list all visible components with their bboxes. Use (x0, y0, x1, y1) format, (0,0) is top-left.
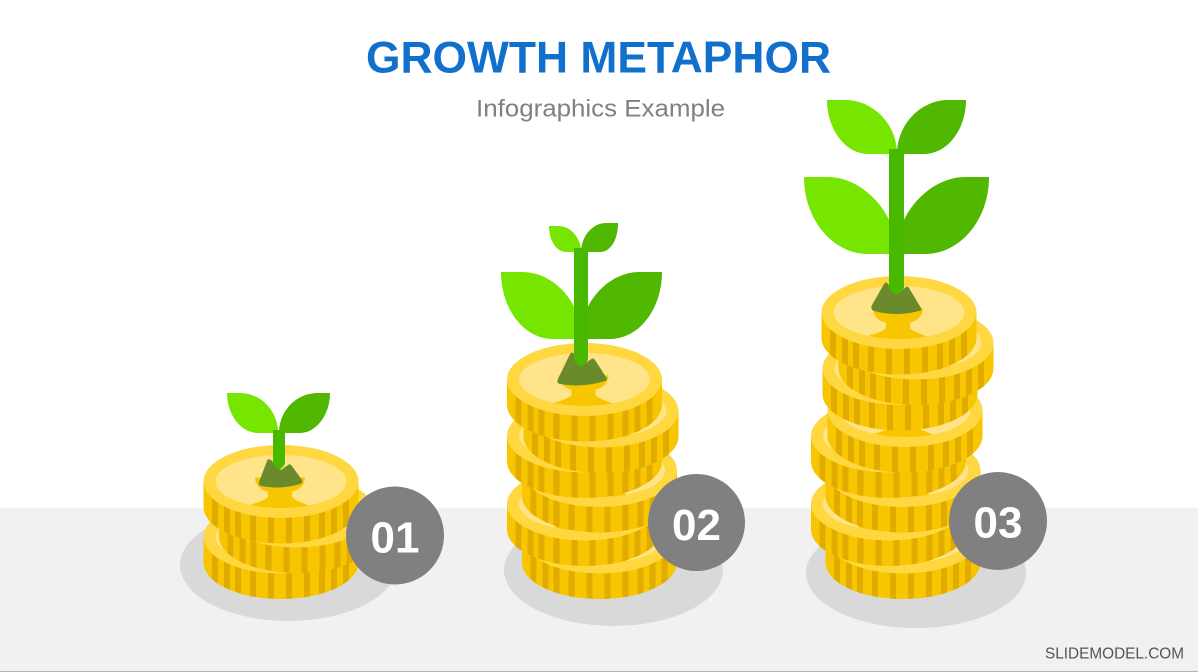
stack 01: coins (204, 445, 374, 607)
stack 02: sprout (501, 223, 662, 385)
stack 03: shadow (806, 518, 1026, 628)
badge 02 (648, 474, 745, 571)
stack 03: coins (811, 276, 994, 607)
footer brand: SLIDEMODEL.COM (1045, 646, 1184, 662)
subtitle: Infographics Example (476, 96, 725, 122)
stack 02: shadow (504, 514, 723, 626)
badge 03 (949, 472, 1047, 570)
badge 01 (346, 486, 444, 584)
badge 03: 03 (974, 498, 1022, 548)
stack 03: sprout (804, 100, 989, 314)
badge 01: 01 (371, 514, 419, 562)
stack 01: shadow (180, 509, 397, 621)
badge 02: 02 (672, 501, 721, 550)
stack 02: coins (507, 343, 678, 607)
title: GROWTH METAPHOR (366, 34, 831, 82)
stack 01: sprout (227, 393, 330, 488)
floor band (0, 508, 1198, 672)
